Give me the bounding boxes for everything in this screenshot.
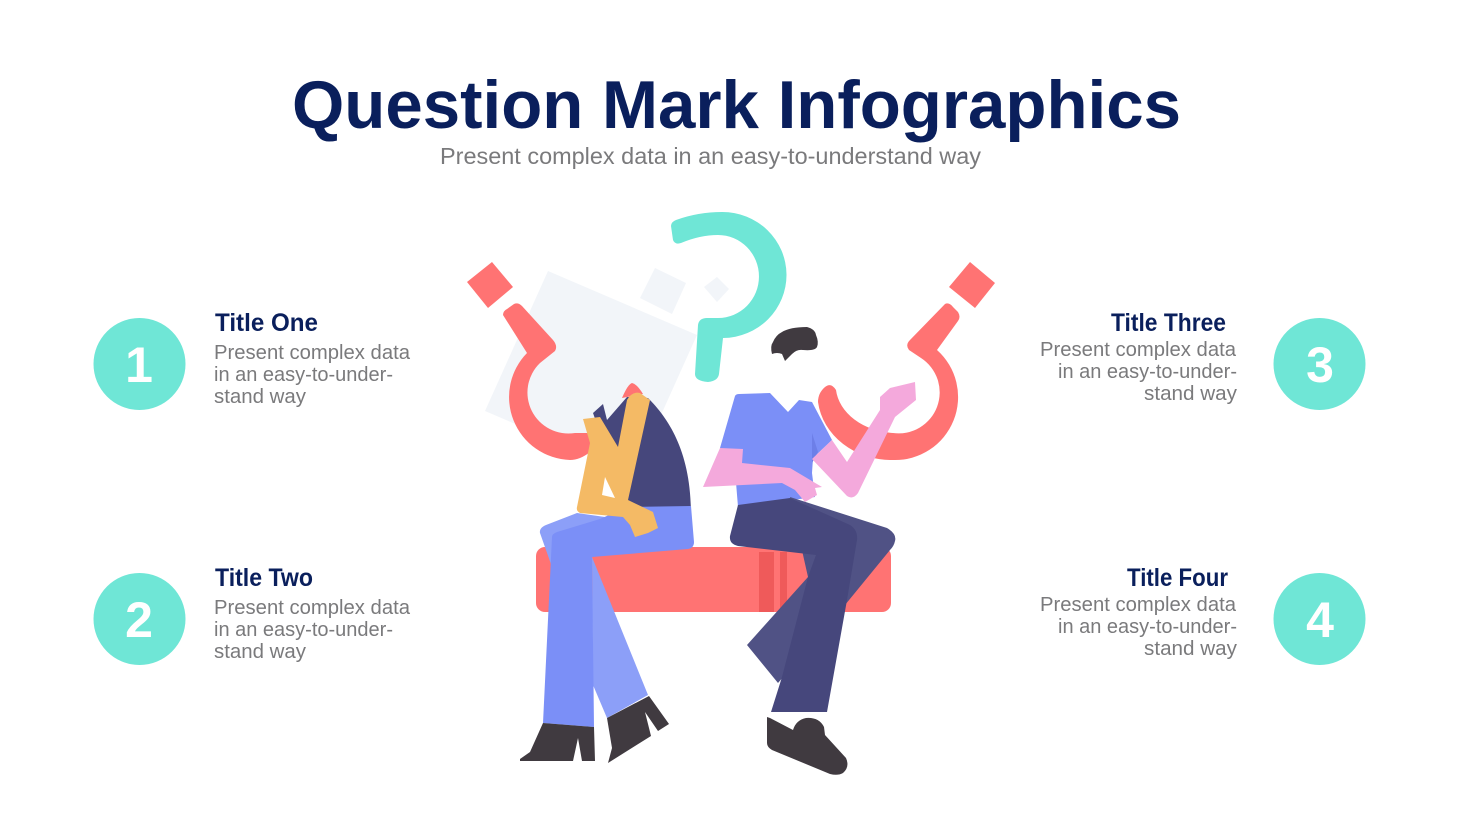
item 3 text: Present complex data [1040, 339, 1237, 361]
item 3 text: in an easy-to-under- [1058, 361, 1237, 383]
item 4 text: stand way [1144, 638, 1237, 660]
number badge 3: 3 [1306, 337, 1334, 393]
man sleeve shadow [812, 433, 818, 463]
woman boots [520, 696, 669, 763]
number badge 4: 4 [1306, 592, 1334, 648]
woman back leg [540, 513, 648, 718]
bench [536, 547, 891, 612]
woman arms [577, 393, 658, 537]
man hair [771, 327, 818, 361]
item 1 heading: Title One [215, 309, 318, 337]
item 2 text: stand way [214, 641, 306, 663]
man arms [703, 382, 916, 502]
item 1 text: stand way [214, 386, 306, 408]
item 3 text: stand way [1144, 383, 1237, 405]
item 2 [94, 564, 411, 665]
item 3 [1040, 309, 1366, 410]
item 1 [94, 309, 411, 410]
man shoe [767, 717, 847, 775]
man back leg [747, 497, 895, 683]
icon: left red question mark [467, 262, 590, 460]
woman torso [593, 397, 691, 510]
number badge 2 [94, 573, 186, 665]
pale background squares [485, 268, 729, 475]
item 1 text: in an easy-to-under- [214, 364, 393, 386]
title: Question Mark Infographics [292, 67, 1181, 143]
item 4 [1040, 564, 1366, 665]
item 2 text [214, 597, 411, 663]
item 2 text: in an easy-to-under- [214, 619, 393, 641]
subtitle: Present complex data in an easy-to-understand way [440, 143, 982, 169]
central illustration [467, 212, 995, 775]
item 1 text [214, 342, 411, 408]
man front leg [730, 498, 857, 712]
number badge 2: 2 [125, 592, 153, 648]
woman front leg [543, 506, 694, 727]
item 2 heading: Title Two [215, 564, 313, 592]
item 4 text: in an easy-to-under- [1058, 616, 1237, 638]
item 4 text: Present complex data [1040, 594, 1237, 616]
icon: teal question mark [671, 212, 787, 382]
number badge 1 [94, 318, 186, 410]
item 4 text [1040, 594, 1237, 660]
item 2 text: Present complex data [214, 597, 411, 619]
item 4 heading: Title Four [1127, 564, 1228, 592]
item 1 text: Present complex data [214, 342, 411, 364]
man figure [703, 327, 916, 775]
number badge 3 [1274, 318, 1366, 410]
number badge 1: 1 [125, 337, 153, 393]
item 3 heading: Title Three [1111, 309, 1226, 337]
item 3 text [1040, 339, 1237, 405]
icon: right red question mark [818, 262, 995, 460]
man shirt [720, 393, 832, 507]
woman figure [520, 383, 694, 763]
red tip behind head [622, 383, 643, 398]
number badge 4 [1274, 573, 1366, 665]
